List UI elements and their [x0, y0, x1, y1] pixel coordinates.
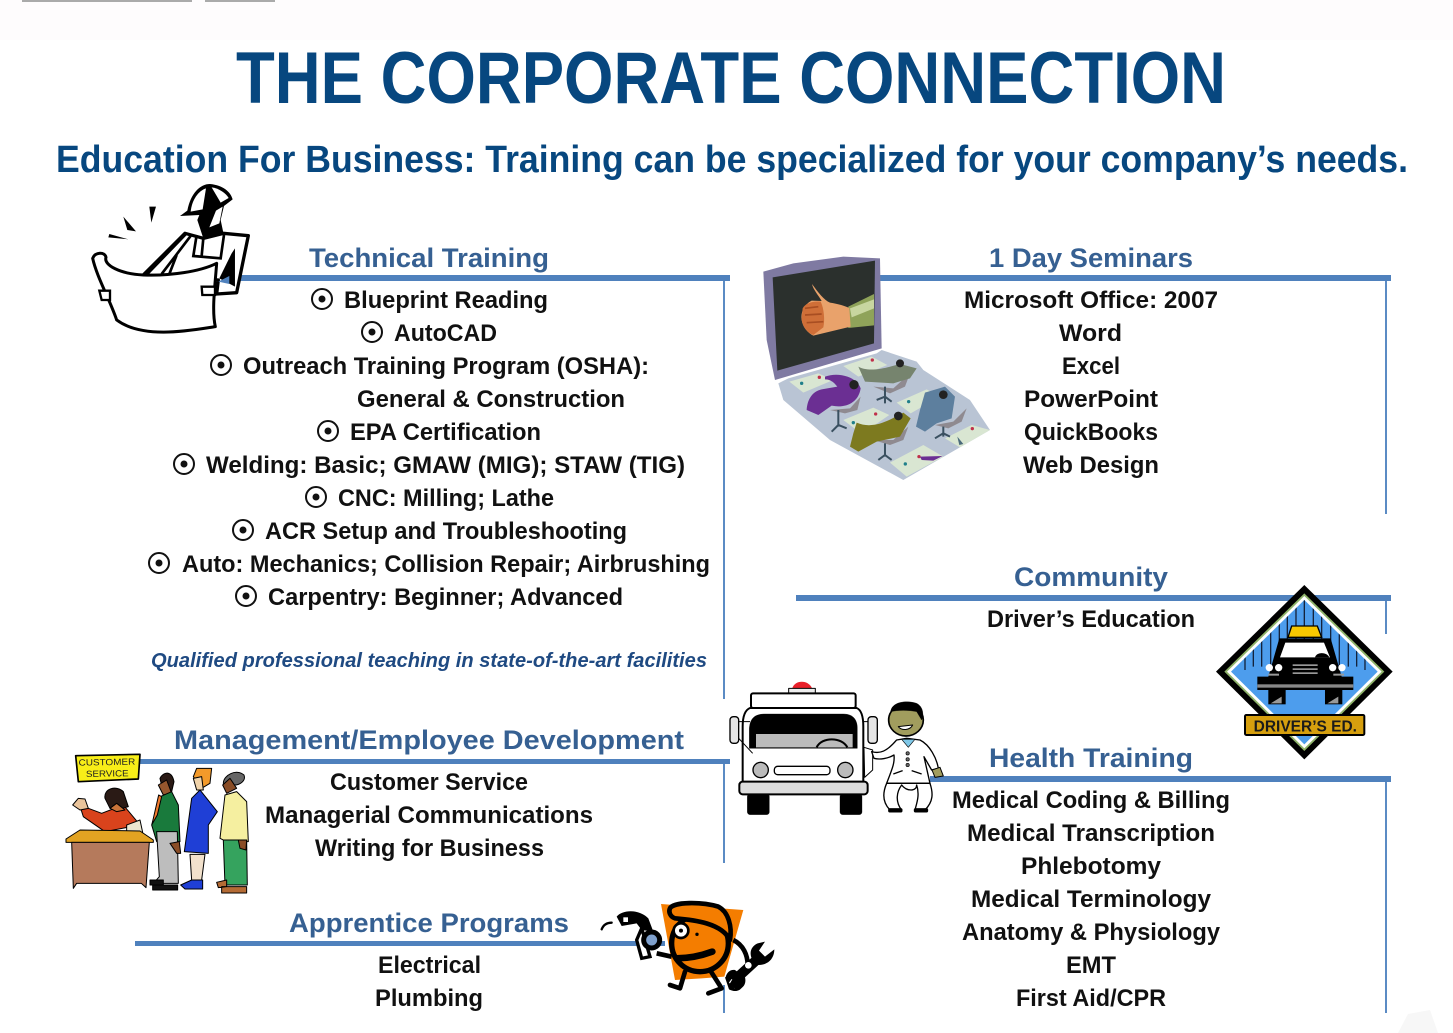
panel: health training: [930, 743, 1391, 1013]
bulleted course list: Outreach Training Program (OSHA):: [243, 353, 649, 380]
heading: community: Community: [1014, 562, 1168, 592]
seminar list: QuickBooks: [1024, 419, 1158, 446]
health course list: Medical Coding & Billing: [952, 787, 1230, 814]
panel: technical training: [149, 243, 730, 699]
bulleted course list: General & Construction: [357, 386, 625, 413]
bulleted course list: [149, 287, 710, 611]
seminar list: Web Design: [1023, 452, 1159, 479]
heading: 1 day seminars: 1 Day Seminars: [989, 243, 1193, 273]
bulleted course list: Auto: Mechanics; Collision Repair; Airbrushing: [182, 551, 710, 578]
icon: customer service desk: [66, 754, 248, 893]
bulleted course list: AutoCAD: [394, 320, 497, 347]
heading: health training: Health Training: [989, 743, 1193, 773]
community course: Driver’s Education: [987, 606, 1195, 633]
icon: mechanic mascot with tools: [602, 903, 774, 993]
apprentice course list: Plumbing: [375, 985, 483, 1012]
icon: customer service desk: CUSTOMER: [79, 757, 136, 768]
icon: worker reading blueprint: [93, 184, 248, 332]
management course list: Writing for Business: [315, 835, 544, 862]
icon: driver's ed sign: DRIVER’S ED.: [1254, 718, 1357, 735]
apprentice course list: [375, 952, 483, 1012]
panel: management and employee development: [140, 725, 730, 863]
bulleted course list: EPA Certification: [350, 419, 541, 446]
health course list: EMT: [1066, 952, 1116, 979]
heading: management: Management/Employee Development: [174, 725, 684, 755]
seminar list: [964, 287, 1218, 479]
panel: community: [796, 562, 1391, 634]
health course list: Medical Transcription: [967, 820, 1215, 847]
bulleted course list: ACR Setup and Troubleshooting: [265, 518, 627, 545]
seminar list: Microsoft Office: 2007: [964, 287, 1218, 314]
tagline: Qualified professional teaching in state-of-the-art facilities: [151, 650, 707, 672]
management course list: Customer Service: [330, 769, 528, 796]
management course list: Managerial Communications: [265, 802, 593, 829]
health course list: Phlebotomy: [1021, 853, 1162, 880]
management course list: [265, 769, 593, 862]
bulleted course list: Welding: Basic; GMAW (MIG); STAW (TIG): [206, 452, 685, 479]
panel: apprentice programs: [135, 908, 725, 1013]
health course list: First Aid/CPR: [1016, 985, 1166, 1012]
seminar list: Excel: [1062, 353, 1120, 380]
health course list: [952, 787, 1230, 1012]
bulleted course list: CNC: Milling; Lathe: [338, 485, 554, 512]
icon: classroom with thumbs-up screen: [763, 257, 990, 480]
bulleted course list: Blueprint Reading: [344, 287, 548, 314]
health course list: Medical Terminology: [971, 886, 1212, 913]
icon: driver's ed sign: [1216, 585, 1393, 759]
decorative corner smudge: [1398, 1010, 1438, 1033]
heading: apprentice programs: Apprentice Programs: [289, 908, 569, 938]
apprentice course list: Electrical: [378, 952, 481, 979]
icon: ambulance and doctor: [730, 682, 943, 815]
wrench: [725, 942, 774, 991]
seminar list: PowerPoint: [1024, 386, 1158, 413]
seminar list: Word: [1059, 320, 1122, 347]
bulleted course list: Carpentry: Beginner; Advanced: [268, 584, 623, 611]
panel: 1 day seminars: [880, 243, 1391, 514]
icon: customer service desk: SERVICE: [86, 768, 129, 779]
health course list: Anatomy & Physiology: [962, 919, 1221, 946]
title: THE CORPORATE CONNECTION: [236, 38, 1226, 119]
heading: technical training: Technical Training: [309, 243, 549, 273]
